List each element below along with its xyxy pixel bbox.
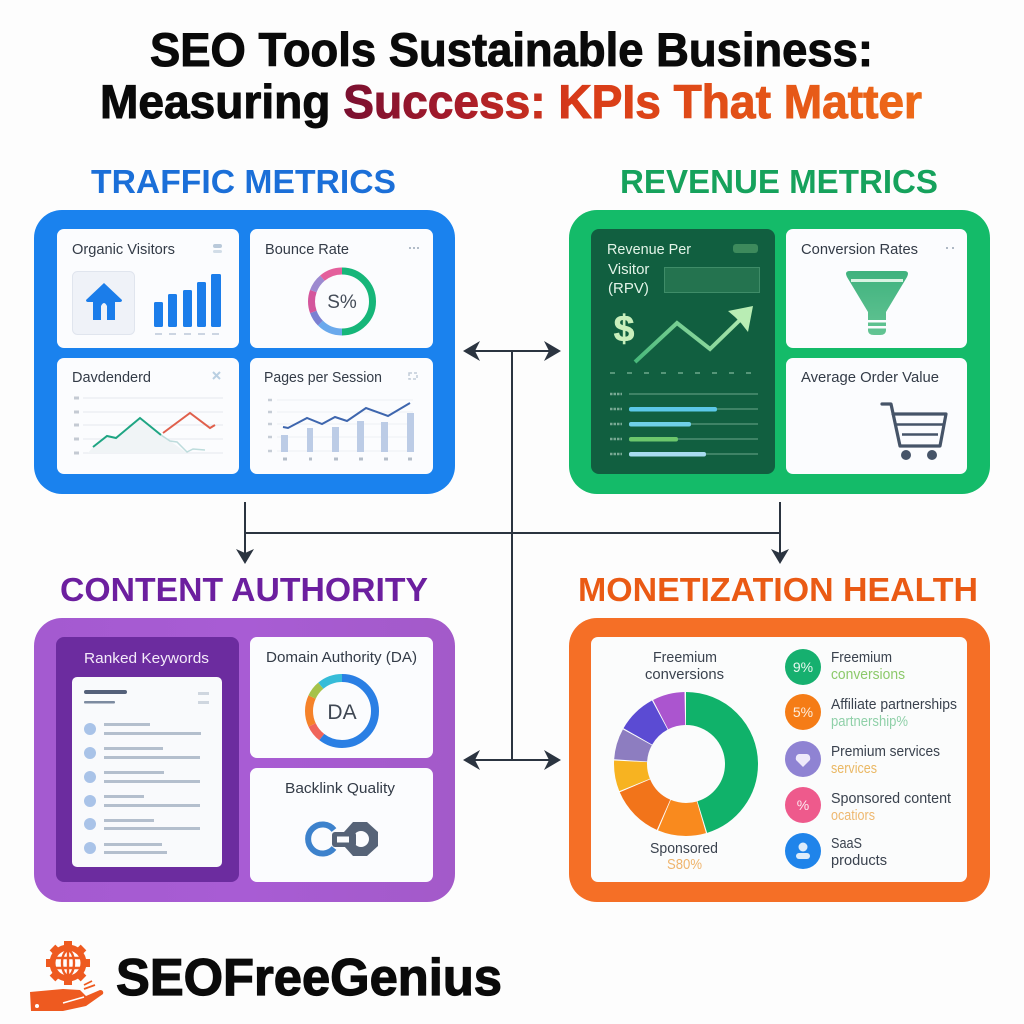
icon: dollar: $ [614, 308, 635, 349]
card: revenue per visitor: Revenue Per [607, 241, 691, 258]
bar chart: visitors [154, 274, 221, 334]
legend: freemium conversions [785, 649, 905, 685]
donut chart: revenue mix [630, 708, 742, 820]
icon: shopping cart [882, 404, 946, 460]
donut label: sponsored [650, 841, 718, 873]
heading: monetization health: MONETIZATION HEALTH [578, 571, 978, 608]
card: backlink quality [250, 768, 433, 882]
legend: sponsored content: Sponsored content [831, 791, 951, 807]
legend: sponsored content: % [797, 797, 809, 813]
card: conversion rates: Conversion Rates [801, 242, 918, 258]
donut: bounce rate [312, 271, 372, 332]
icon: home [72, 272, 134, 334]
hand [30, 981, 103, 1011]
legend: affiliate partnerships: Affiliate partnerships [831, 697, 957, 713]
legend: sponsored content [785, 787, 951, 824]
card: bounce rate: S% [327, 292, 357, 313]
legend: saas products: SaaS [831, 836, 862, 852]
card: bounce rate: Bounce Rate [265, 242, 349, 258]
title: Measuring Success: KPIs That Matter [100, 75, 922, 128]
card: ranked keywords [56, 637, 239, 882]
brand name: SEOFreeGenius [116, 949, 502, 1007]
card: organic visitors: Organic Visitors [72, 242, 175, 258]
legend: premium services [785, 741, 940, 777]
icon: funnel [846, 271, 908, 335]
legend: premium services: services [831, 761, 877, 777]
card: pages per session [250, 358, 433, 474]
card: bounce rate [250, 229, 433, 348]
heading: content authority: CONTENT AUTHORITY [60, 571, 428, 608]
card: organic visitors [57, 229, 239, 348]
card: domain authority: DA [327, 701, 357, 724]
card: revenue per visitor: Visitor [608, 261, 649, 278]
card: ranked keywords: Ranked Keywords [84, 650, 209, 667]
title: SEO Tools Sustainable Business: [150, 23, 873, 76]
legend: affiliate partnerships: 5% [793, 704, 813, 720]
panel: monetization health [569, 618, 990, 902]
donut label: sponsored: S80% [667, 857, 702, 873]
card: dashboard line chart [57, 358, 239, 474]
donut label: sponsored: Sponsored [650, 841, 718, 857]
card: domain authority: Domain Authority (DA) [266, 650, 417, 666]
card: revenue per visitor [591, 229, 775, 474]
legend: saas products [785, 833, 887, 869]
trend arrow [635, 306, 753, 362]
gear [46, 941, 90, 985]
icon: chain link [308, 822, 378, 856]
panel: traffic metrics [34, 210, 455, 494]
panel: content authority [34, 618, 455, 902]
panel: revenue metrics [569, 210, 990, 494]
keyword list [84, 723, 201, 854]
legend: premium services: Premium services [831, 744, 940, 760]
card: average order value: Average Order Value [801, 370, 939, 386]
legend: freemium conversions: 9% [793, 659, 813, 675]
connector arrows [236, 341, 789, 770]
legend: freemium conversions: Freemium [831, 650, 892, 666]
heading: revenue metrics: REVENUE METRICS [620, 163, 938, 200]
legend: affiliate partnerships: partnership% [831, 714, 908, 730]
legend: sponsored content: ocatiors [831, 808, 875, 824]
donut: domain authority [309, 678, 375, 744]
title [100, 23, 922, 128]
card: revenue per visitor: (RPV) [608, 280, 649, 297]
donut label: freemium: Freemium [653, 650, 717, 666]
progress bars [610, 394, 758, 456]
donut label: freemium [645, 650, 724, 683]
card: dashboard line chart: Davdenderd [72, 370, 151, 386]
legend: saas products: products [831, 853, 887, 869]
legend: freemium conversions: conversions [831, 667, 905, 683]
donut label: freemium: conversions [645, 667, 724, 683]
heading: traffic metrics: TRAFFIC METRICS [91, 163, 396, 200]
card: backlink quality: Backlink Quality [285, 781, 396, 797]
card: domain authority [250, 637, 433, 758]
card: average order value [786, 358, 967, 474]
card: pages per session: Pages per Session [264, 370, 382, 386]
logo icon: gear and hand [30, 941, 103, 1011]
legend: affiliate partnerships [785, 694, 957, 730]
card: conversion rates [786, 229, 967, 348]
